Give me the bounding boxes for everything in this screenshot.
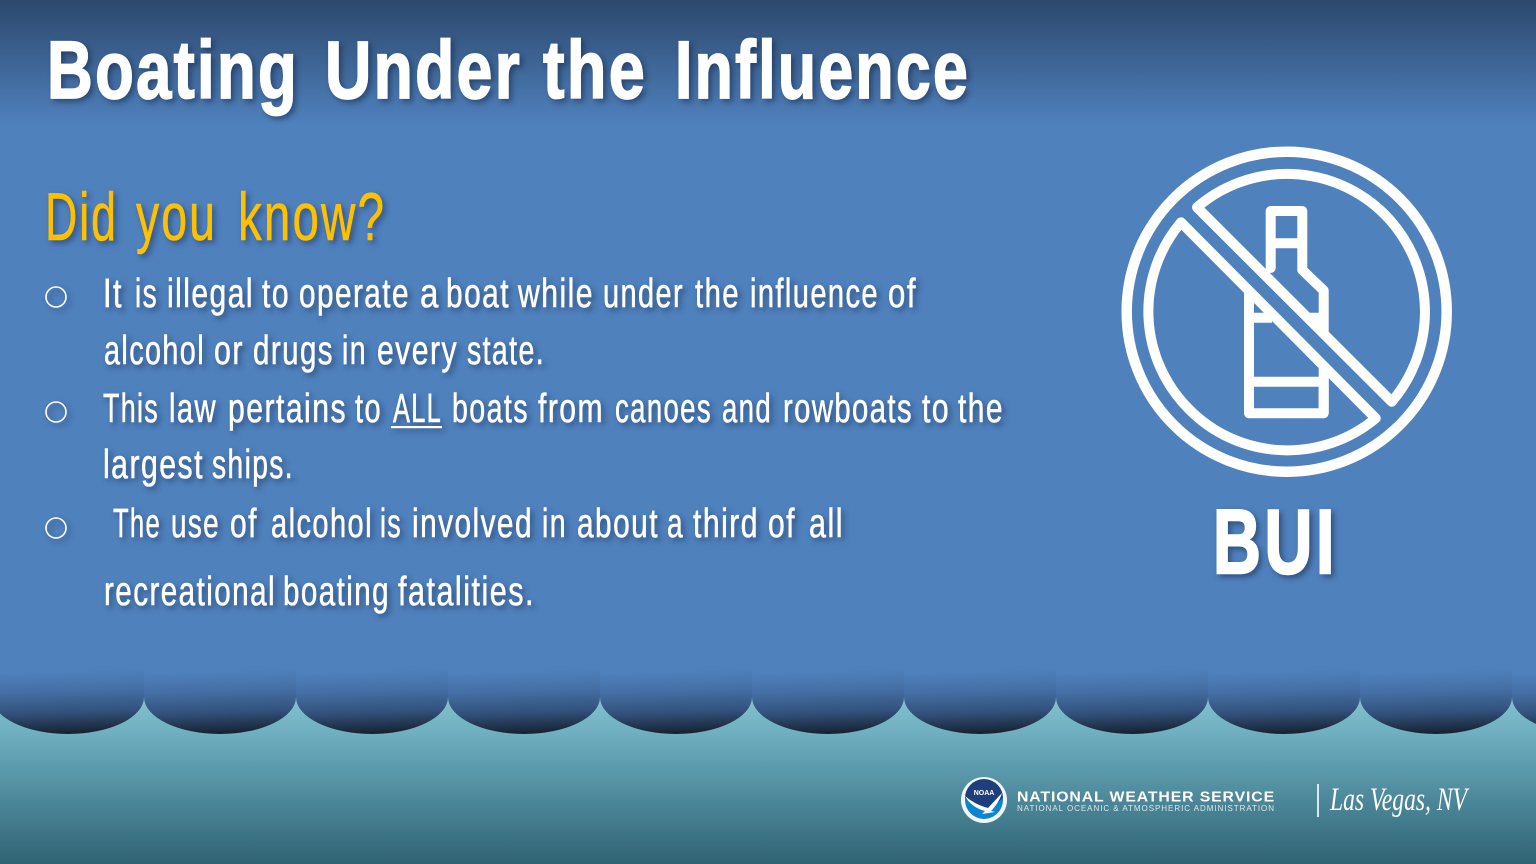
bullet 1: influence: [750, 270, 879, 316]
bullet 1: the: [695, 270, 740, 316]
bullet 3: third: [693, 500, 759, 546]
title: Boating: [47, 25, 299, 116]
bullet 3: [46, 500, 844, 614]
icon: no alcohol bottle: [1127, 152, 1447, 472]
bullet 1: state.: [467, 327, 545, 373]
bullet 2: and: [722, 385, 772, 431]
agency name: [1017, 790, 1275, 813]
bullet 2: law: [169, 385, 217, 431]
bullet 3: boating: [283, 568, 390, 614]
bullet list: [46, 270, 1004, 614]
bullet 1: under: [603, 270, 684, 316]
bullet 3: in: [542, 500, 567, 546]
bullet 3: of: [768, 500, 796, 546]
bullet 3: a: [667, 500, 684, 546]
bullet 2: [46, 385, 1004, 487]
bullet 1: operate: [299, 270, 410, 316]
bullet 2: to: [355, 385, 382, 431]
bullet 3: fatalities.: [398, 568, 535, 614]
bullet 2: boats: [452, 385, 529, 431]
icon: NOAA logo: NOAA: [974, 790, 994, 797]
bullet 1: [46, 270, 917, 373]
title: the: [543, 25, 647, 116]
bullet 2: largest: [103, 441, 204, 487]
sea band: [0, 690, 1536, 864]
bullet 2: This: [103, 385, 159, 431]
bullet 1: to: [262, 270, 290, 316]
heading: did you know: [45, 179, 386, 255]
bullet 2: rowboats: [783, 385, 913, 431]
bullet 2: ships.: [212, 441, 294, 487]
heading: did you know: Did: [45, 179, 118, 255]
title: Under: [325, 25, 522, 116]
bullet 3: of: [230, 500, 258, 546]
bullet 2: ALL: [393, 385, 442, 431]
bullet 1: or: [214, 327, 244, 373]
bullet 3: alcohol: [271, 500, 373, 546]
bullet 1: in: [342, 327, 367, 373]
bullet 2: pertains: [228, 385, 347, 431]
bullet 1: a: [420, 270, 440, 316]
divider and office name: Las Vegas, NV: [1329, 782, 1470, 818]
title: Influence: [675, 25, 970, 116]
bullet 3: involved: [412, 500, 533, 546]
scalloped waves: [0, 655, 1536, 734]
bullet 3: is: [380, 500, 402, 546]
title: [47, 25, 970, 116]
heading: did you know: you: [136, 179, 217, 255]
bullet 2: canoes: [615, 385, 712, 431]
bullet 3: The: [113, 500, 161, 546]
bullet 1: drugs: [253, 327, 334, 373]
bullet 3: all: [809, 500, 844, 546]
bullet 1: every: [377, 327, 458, 373]
bullet 2: the: [958, 385, 1004, 431]
heading: did you know: know?: [238, 179, 386, 255]
bullet 3: use: [171, 500, 220, 546]
bullet 1: illegal: [167, 270, 254, 316]
bullet 1: of: [888, 270, 917, 316]
agency name: NATIONAL WEATHER SERVICE: [1017, 790, 1275, 806]
agency name: NATIONAL OCEANIC & ATMOSPHERIC ADMINISTRATION: [1017, 803, 1275, 813]
bullet 1: boat: [446, 270, 510, 316]
bullet 3: about: [577, 500, 659, 546]
bullet 1: while: [517, 270, 594, 316]
bullet 3: recreational: [104, 568, 276, 614]
bullet 2: to: [922, 385, 950, 431]
bullet 1: alcohol: [104, 327, 205, 373]
bullet 1: is: [135, 270, 158, 316]
label: BUI: BUI: [1213, 492, 1338, 593]
bullet 1: It: [103, 270, 123, 316]
bullet 2: from: [538, 385, 604, 431]
icon: NOAA logo: [961, 777, 1007, 823]
